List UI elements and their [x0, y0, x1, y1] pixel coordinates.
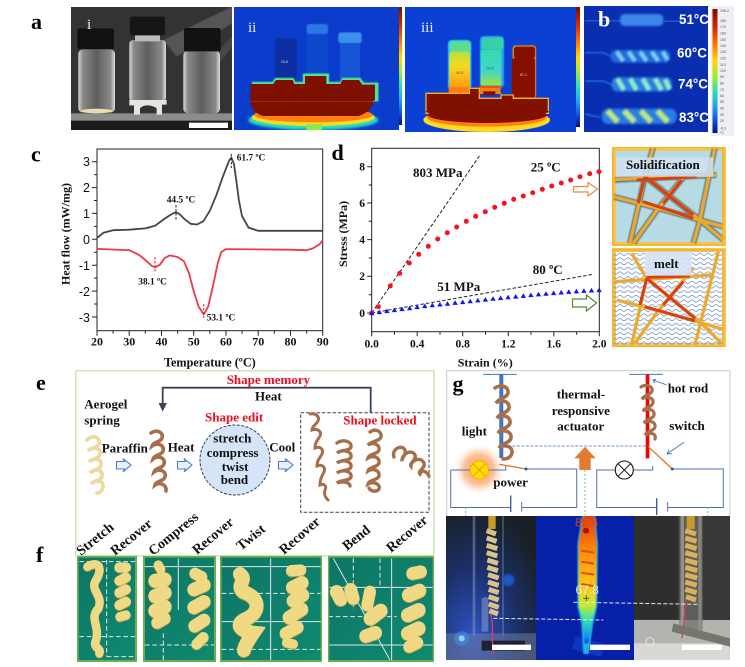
actuator label: actuator: [557, 419, 604, 434]
light glow: [454, 444, 504, 494]
label f: f: [36, 542, 44, 567]
colorbar legend: 120: [720, 56, 726, 60]
modulus fit lines: [372, 155, 593, 313]
colorbar legend: 40: [720, 106, 724, 110]
thermal image iii: 56.8: [486, 66, 494, 70]
colorbar sliver iii: [576, 7, 580, 127]
colorbar legend: 160: [720, 32, 726, 36]
switch closed: [499, 464, 526, 469]
chart c: DSC heat flow: 20: [91, 334, 103, 348]
colorbar legend: 180: [720, 19, 726, 23]
colorbar legend: 70: [720, 88, 724, 92]
panel b: thermal springs: 74°C: [678, 76, 708, 92]
right bottle: [512, 45, 536, 99]
chart d: stress strain: 0.4: [410, 338, 425, 350]
chart c: DSC heat flow: 2: [83, 181, 90, 195]
spring at 60 C: [585, 50, 670, 63]
spring at 83 C: [585, 109, 677, 124]
chart c: DSC heat flow: -2: [79, 285, 90, 299]
schematic: melt: [612, 248, 726, 347]
chart c: DSC heat flow: 50: [188, 334, 200, 348]
label g: g: [452, 371, 464, 396]
cool label: Cool: [269, 440, 296, 455]
schematic: melt: melt: [654, 256, 679, 271]
peak markers: [155, 154, 231, 318]
rotated sample labels: Recover: [384, 513, 431, 556]
shape edit circle: compress: [207, 445, 258, 460]
pointer hot rod: [653, 380, 667, 385]
spring on hot rod: [641, 385, 655, 439]
right circuit: [597, 374, 723, 515]
dashed alignment lines across photos: [493, 602, 698, 620]
chart c: DSC heat flow: 80: [284, 334, 296, 348]
colorbar legend: 140: [720, 44, 726, 48]
left bottle: [448, 40, 471, 95]
colorbar legend: 196.2: [720, 9, 729, 13]
shape edit circle: twist: [222, 459, 249, 474]
heat label top: Heat: [255, 389, 282, 404]
rotated sample labels: Bend: [340, 523, 374, 554]
shape edit circle: bend: [221, 472, 249, 487]
colorbar legend: 100: [720, 69, 726, 73]
chart annotations: [413, 160, 563, 294]
hot rod: [629, 374, 663, 458]
rotated sample labels: Recover: [277, 515, 324, 558]
colorbar legend: 90: [720, 75, 724, 79]
colorbar sliver ii: [399, 7, 402, 125]
bulb: [615, 461, 633, 479]
axis title temperature: Temperature (ºC): [164, 356, 256, 370]
colorbar legend: °C: [720, 131, 724, 135]
spring at 51 C: [585, 14, 683, 26]
aerogel spring: [87, 437, 103, 493]
rotated sample labels: Recover: [108, 517, 156, 559]
light label: light: [462, 424, 488, 439]
cold rod: [483, 374, 517, 458]
thermal image iii: iii: [421, 20, 434, 36]
heading shape edit: Shape edit: [205, 410, 264, 425]
peak labels: [138, 154, 266, 324]
chart d: stress strain: 0: [359, 308, 365, 320]
green guide lines: [466, 470, 708, 533]
chart c: DSC heat flow: 1: [83, 207, 90, 221]
step arrow 1: [116, 458, 131, 472]
schematic: solidification: [603, 147, 726, 246]
chart d: stress strain: 2: [359, 271, 365, 283]
peak labels: 61.7 ºC: [237, 154, 266, 164]
thermal image ii: 24.6: [281, 60, 288, 64]
rotated sample labels: Twist: [234, 522, 269, 554]
rotated sample labels: Compress: [146, 510, 202, 559]
actuator label: responsive: [552, 403, 610, 418]
spring on rod: [495, 386, 512, 459]
panel g frame: [447, 371, 730, 517]
heading shape memory: Shape memory: [227, 372, 311, 387]
photo f3: twist: [220, 556, 322, 662]
power label: power: [493, 475, 528, 490]
chart d: stress strain: 2.0: [592, 338, 607, 350]
chart d: stress strain: 0.8: [456, 338, 470, 350]
step arrow 3: [278, 458, 293, 472]
paraffin label: Paraffin: [102, 440, 149, 455]
panel b: thermal springs: [584, 6, 709, 132]
panel e frame: [76, 371, 434, 556]
actuator up arrow: [574, 447, 596, 470]
thermal photo of actuator: 85.4: [575, 516, 599, 530]
thermal image iii: 45.8: [456, 71, 463, 75]
axis title stress: Stress (MPa): [336, 201, 350, 267]
chart annotations: 25 ºC: [531, 160, 561, 175]
shape locked box: [301, 412, 429, 512]
chart c: DSC heat flow: 0: [83, 233, 90, 247]
actuator label: [552, 386, 610, 434]
heading shape locked: Shape locked: [343, 412, 417, 427]
thermal image iii: [405, 7, 576, 132]
panel b: thermal springs: 51°C: [679, 12, 709, 27]
brown spring: [151, 431, 166, 491]
shape edit circle: [200, 425, 270, 495]
axis title strain: Strain (%): [458, 356, 513, 370]
rotated sample labels: Stretch: [74, 520, 117, 559]
heating curve: [97, 158, 323, 238]
label d: d: [332, 140, 344, 165]
photo i: glass vials: [71, 7, 232, 130]
middle bottle: [479, 36, 504, 89]
colorbar legend: 60: [720, 94, 724, 98]
chart c: DSC heat flow: 3: [83, 155, 90, 169]
chart d: stress strain: 1.2: [501, 338, 516, 350]
compressed spring: [337, 441, 351, 486]
chart d: stress strain: 4: [359, 234, 365, 246]
rotated sample labels: [74, 510, 431, 559]
photo: actuator with light off: [634, 516, 730, 660]
rotated sample labels: Recover: [190, 515, 237, 558]
actuator label: thermal-: [557, 386, 605, 401]
cooling curve: [97, 241, 323, 314]
chart d: stress strain: [336, 148, 607, 370]
chart c: DSC heat flow: -3: [79, 311, 90, 325]
chart annotations: 51 MPa: [437, 279, 481, 294]
colorbar legend: 150: [720, 38, 726, 42]
thermal photo of actuator: [536, 516, 634, 660]
dashed level line: [503, 445, 648, 447]
arrow to solidification: [574, 182, 598, 196]
25 C data: [369, 169, 602, 316]
80 C data: [369, 288, 602, 315]
vial 1: [77, 28, 115, 113]
light bulb: [470, 461, 488, 479]
vial 2: [129, 17, 167, 115]
aerogel label: spring: [84, 412, 120, 427]
chart c: DSC heat flow: 30: [123, 334, 135, 348]
chart d: stress strain: 8: [359, 162, 365, 174]
colorbar legend: 110: [720, 63, 726, 67]
chart c: DSC heat flow: 60: [220, 334, 232, 348]
photo f2: compress: [143, 556, 216, 662]
thermal image ii: [234, 7, 399, 131]
spring at 74 C: [585, 77, 672, 91]
switch label: switch: [669, 418, 705, 433]
chart c: DSC heat flow: 70: [252, 334, 264, 348]
chart d: stress strain: 0.0: [365, 338, 379, 350]
pointer switch: [667, 442, 684, 454]
thermal image ii: ii: [248, 20, 256, 36]
stretched spring: [310, 414, 328, 500]
thermal image iii: 87.1: [520, 73, 527, 77]
shape memory arrow: [158, 388, 371, 413]
panel b: thermal springs: 83°C: [679, 110, 709, 125]
chart annotations: 80 ºC: [533, 262, 563, 277]
aerogel label: Aerogel: [84, 396, 128, 411]
heat label: Heat: [168, 440, 195, 455]
label a: a: [31, 9, 42, 34]
schematic: solidification: Solidification: [626, 157, 700, 172]
vial 3: [183, 28, 221, 113]
axis title heat flow: Heat flow (mW/mg): [58, 183, 72, 285]
colorbar legend: 30: [720, 113, 724, 117]
photo f4: bend: [328, 556, 434, 662]
shape edit circle: stretch: [213, 430, 252, 445]
label e: e: [36, 370, 46, 395]
colorbar legend: 50: [720, 100, 724, 104]
peak labels: 53.1 ºC: [207, 314, 236, 324]
left circuit: [451, 374, 577, 512]
panel b: thermal springs: b: [598, 6, 610, 32]
photo i: glass vials: i: [87, 17, 91, 33]
twisted spring: [368, 430, 381, 491]
colorbar legend: -8.3: [720, 126, 726, 130]
colorbar legend: 20: [720, 119, 724, 123]
panel b: thermal springs: 60°C: [677, 46, 707, 60]
chart c: DSC heat flow: -1: [79, 259, 90, 273]
aerogel label: [84, 396, 128, 427]
colorbar legend: 170: [720, 25, 726, 29]
arrow to melt: [572, 295, 596, 311]
peak labels: 44.5 ºC: [167, 196, 196, 206]
chart annotations: 803 MPa: [413, 165, 463, 180]
colorbar legend: 130: [720, 50, 726, 54]
colorbar legend: [711, 6, 734, 136]
step arrow 2: [178, 458, 192, 472]
hot rod label: hot rod: [668, 381, 709, 396]
chart c: DSC heat flow: 40: [156, 334, 168, 348]
colorbar legend: 80: [720, 82, 724, 86]
thermal photo of actuator: 67.8: [576, 583, 599, 597]
bent spring: [393, 447, 429, 476]
chart d: stress strain: 6: [359, 198, 365, 210]
photo f1: stretch: [77, 556, 137, 662]
peak labels: 38.1 ºC: [138, 277, 167, 287]
chart d: stress strain: 1.6: [547, 338, 561, 350]
photo: actuator with light on: [446, 516, 536, 660]
chart c: DSC heat flow: 90: [317, 334, 329, 348]
switch open: [648, 447, 672, 469]
chart c: DSC heat flow: [58, 149, 329, 370]
label c: c: [31, 142, 41, 166]
